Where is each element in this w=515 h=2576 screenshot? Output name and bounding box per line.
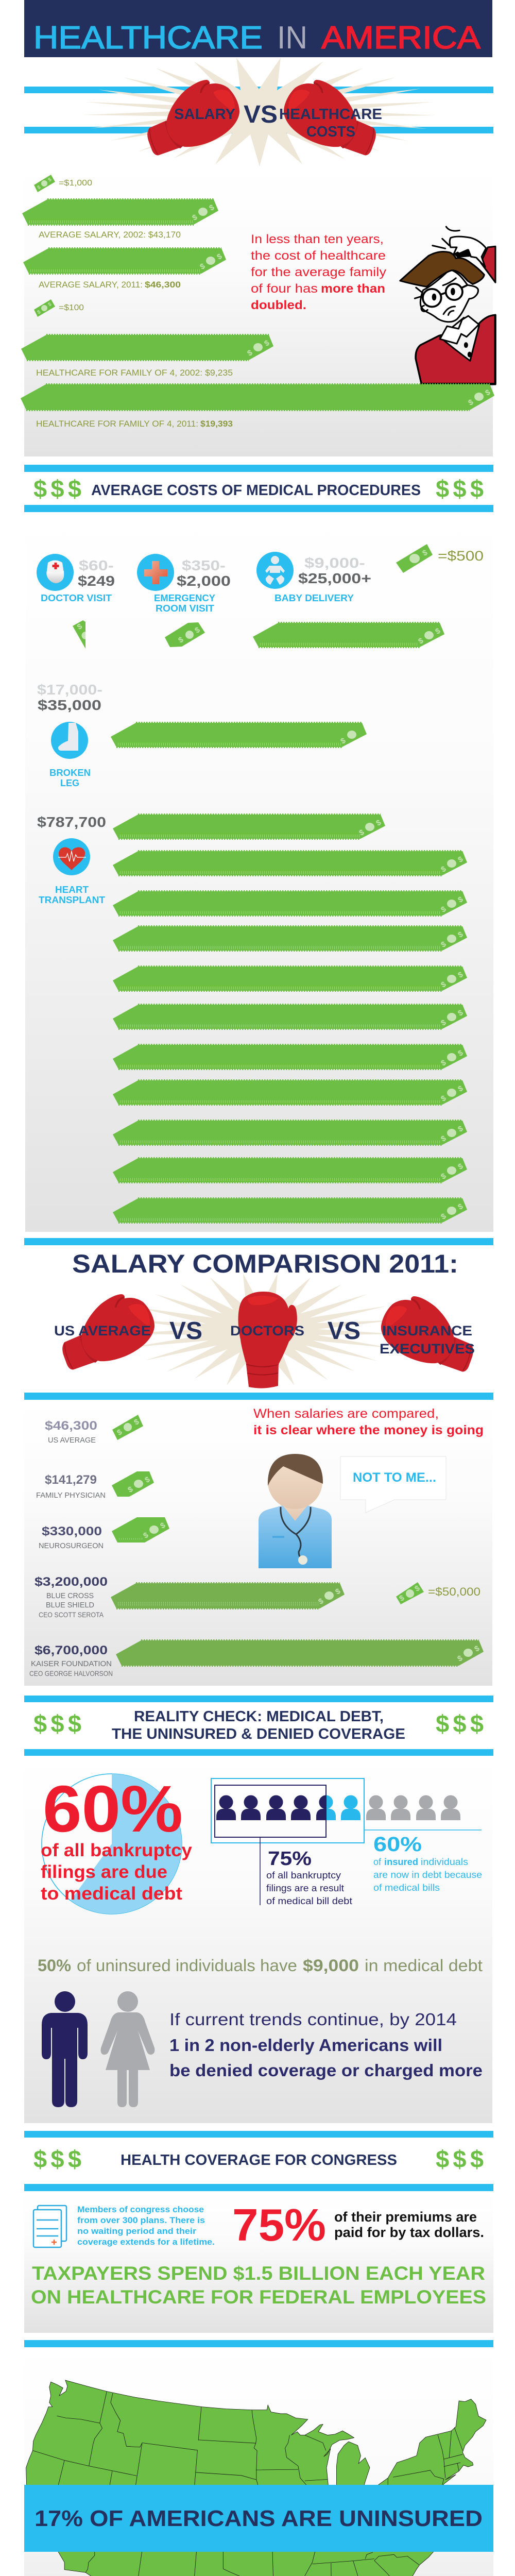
cost: doctor visit: DOCTOR VISIT (41, 593, 112, 603)
stat: 60 percent bankruptcies: 60% (43, 1772, 183, 1846)
stat: 60 percent of insured: are now in debt because (373, 1870, 482, 1880)
panel: medical procedure costs (25, 512, 493, 1232)
bar: transplant row 10: $ (439, 1172, 448, 1181)
salary: blue cross blue shield CEO: CEO SCOTT SEROTA (39, 1611, 104, 1619)
bar: transplant row 7: $ (456, 1048, 465, 1058)
heading: salary comparison: SALARY COMPARISON 2011: (72, 1249, 458, 1278)
icon: red cross (137, 554, 174, 591)
salary: US average: $46,300 (45, 1419, 97, 1433)
bar: transplant row 1 (113, 814, 385, 839)
bar: transplant row 4: $ (456, 930, 465, 940)
comparison labels: INSURANCE (382, 1323, 472, 1338)
icon: glove middle (238, 1292, 297, 1388)
header banner (24, 0, 492, 57)
legend: bill equals $1,000 (34, 175, 92, 192)
salary: kaiser foundation CEO: CEO GEORGE HALVORSON (29, 1669, 113, 1677)
cost: heart transplant (37, 814, 106, 905)
cost: doctor visit: $60- (79, 557, 114, 573)
panel: medical debt (24, 1756, 492, 2123)
bar: transplant row 2 (113, 851, 467, 876)
bar: transplant row 9: $ (456, 1124, 465, 1134)
bar: transplant row 6 (113, 1004, 467, 1029)
salary: blue cross blue shield CEO: $ (334, 1587, 342, 1597)
callout: where the money is going: it is clear where the money is going (253, 1423, 484, 1437)
heading: salary vs healthcare costs: SALARY (174, 106, 235, 123)
heading: average costs of medical procedures: $$$ (33, 475, 81, 502)
icon: glove left (62, 1294, 154, 1369)
bar: transplant row 1: $ (357, 828, 366, 838)
bar: transplant row 3: $ (456, 895, 465, 905)
section: salary comparison 2011 (24, 1238, 493, 1388)
icon: leg cast (51, 722, 88, 759)
salary: kaiser foundation CEO (29, 1640, 484, 1677)
bar: healthcare family of 4 2011 (21, 384, 494, 411)
callout: cost more than doubled: more than (321, 282, 385, 296)
salary: neurosurgeon: $ (159, 1521, 167, 1531)
bill: emergency room: $ (193, 625, 202, 635)
heading: health coverage for congress (24, 2131, 493, 2191)
salary: US average: US AVERAGE (48, 1436, 96, 1445)
salary: blue cross blue shield CEO: $3,200,000 (35, 1575, 108, 1589)
stat: 60 percent bankruptcies: to medical debt (41, 1884, 182, 1904)
bar: transplant row 6: $ (439, 1018, 448, 1028)
heading: salary vs healthcare costs: HEALTHCARE (279, 106, 382, 123)
bar: baby delivery: $ (417, 636, 425, 646)
callout: cost more than doubled (251, 232, 386, 312)
comparison labels: DOCTORS (230, 1323, 304, 1338)
speech bubble: not to me: NOT TO ME... (353, 1470, 436, 1485)
cost: emergency room visit: ROOM VISIT (156, 603, 214, 614)
heading: reality check (24, 1696, 493, 1756)
text: members of congress: from over 300 plans. There is (77, 2215, 205, 2225)
bar: transplant row 3 (113, 891, 467, 916)
salary: blue cross blue shield CEO (35, 1575, 345, 1619)
label: average salary 2011: AVERAGE SALARY, 2011: (39, 280, 143, 290)
speech bubble: not to me (340, 1456, 446, 1513)
heading: health coverage for congress: HEALTH COVERAGE FOR CONGRESS (121, 2152, 397, 2168)
stat: 75 percent of premiums (232, 2199, 484, 2250)
stat: 75 percent medical bill debt: 75% (268, 1848, 312, 1870)
cost: emergency room visit: $350- (182, 557, 226, 573)
text: members of congress: Members of congress choose (77, 2205, 204, 2214)
legend: bill equals $100: =$100 (59, 303, 84, 312)
bar: transplant row 2: $ (439, 865, 448, 874)
salary vs healthcare costs boxing graphic (24, 58, 493, 166)
text: taxpayers spend (31, 2263, 486, 2308)
bar: transplant row 7: $ (439, 1058, 448, 1068)
cost: broken leg (37, 682, 102, 788)
heading: reality check: $$$ (436, 1710, 484, 1737)
cost: heart transplant: TRANSPLANT (39, 895, 105, 905)
stat: 75 percent medical bill debt: of all bankruptcy (266, 1870, 341, 1880)
panel: salaries compared (24, 1393, 493, 1686)
bar: transplant row 5 (113, 966, 467, 991)
cost: broken leg: BROKEN (49, 768, 91, 778)
bar: healthcare family of 4 2011: $ (484, 388, 492, 398)
legend: bill equals $100 (34, 299, 84, 317)
text: denied coverage forecast: 1 in 2 non-elderly Americans will (169, 2036, 442, 2055)
heading: health coverage for congress: $$$ (436, 2145, 484, 2173)
legend: bill equals $100: $ (47, 301, 53, 308)
stat: 60 percent of insured: 60% (373, 1833, 422, 1856)
title: IN (277, 20, 307, 56)
label: healthcare 2011: HEALTHCARE FOR FAMILY OF 4, 2011: (36, 419, 198, 429)
bar: transplant row 5: $ (456, 970, 465, 980)
legend: bill equals $100: $ (37, 309, 42, 315)
bar: transplant row 3: $ (439, 905, 448, 914)
text: members of congress: coverage extends for a lifetime. (77, 2237, 215, 2247)
legend: bill equals $1,000: $ (47, 177, 53, 183)
legend: bill equals $50,000: $ (413, 1584, 422, 1594)
stat: 60 percent bankruptcies: filings are due (41, 1862, 167, 1882)
icon: glove right (381, 1296, 473, 1371)
banner: 17 percent uninsured (24, 2485, 493, 2552)
salary: neurosurgeon: $330,000 (42, 1524, 102, 1538)
heading: salary vs healthcare costs: VS (244, 101, 278, 128)
bar: transplant row 11: $ (439, 1212, 448, 1222)
comparison labels: US AVERAGE (54, 1323, 151, 1338)
text: taxpayers spend: TAXPAYERS SPEND $1.5 BILLION EACH YEAR (32, 2263, 485, 2284)
stat: 75 percent of premiums: of their premiums are (334, 2209, 477, 2225)
legend: bill equals $1,000: =$1,000 (59, 179, 92, 188)
cost: doctor visit (41, 557, 115, 603)
bar: broken leg (111, 722, 367, 748)
cost: emergency room visit (154, 557, 231, 614)
cost: baby delivery: $9,000- (304, 555, 365, 571)
icon: nurse hat (37, 554, 74, 591)
bar: transplant row 11: $ (456, 1202, 465, 1212)
bar: average salary 2002 (22, 199, 218, 225)
bar: average salary 2002: $ (208, 203, 216, 213)
legend: bill equals $50,000 (396, 1582, 480, 1604)
stat: 60 percent of insured: insured (384, 1857, 418, 1867)
stat: 60 percent of insured: of medical bills (373, 1883, 440, 1893)
bar: broken leg: $ (339, 736, 348, 746)
comparison labels: VS (169, 1317, 202, 1345)
callout: cost more than doubled: doubled. (251, 298, 306, 312)
salary: kaiser foundation CEO: $ (473, 1644, 482, 1654)
panel: salary and healthcare bars (21, 169, 495, 456)
cost: baby delivery (274, 555, 371, 603)
icon: woman (101, 1991, 154, 2107)
callout: cost more than doubled: for the average family (251, 265, 386, 279)
callout: where the money is going (253, 1406, 484, 1437)
stat: 75 percent of premiums: 75% (232, 2199, 326, 2250)
stat: 75 percent medical bill debt: of medical bill debt (266, 1896, 352, 1906)
salary: blue cross blue shield CEO: BLUE CROSS (46, 1591, 94, 1600)
salary: US average (45, 1415, 143, 1445)
bar: transplant row 11 (113, 1198, 467, 1223)
bar: healthcare family of 4 2002: $ (246, 348, 254, 358)
bar: transplant row 7 (113, 1044, 467, 1070)
label: healthcare 2002: HEALTHCARE FOR FAMILY OF 4, 2002: $9,235 (36, 368, 233, 378)
legend: bill equals $500 (396, 544, 484, 573)
heading: salary vs healthcare costs (174, 101, 382, 140)
stat: 75 percent medical bill debt (266, 1848, 352, 1906)
bar: transplant row 10: $ (456, 1162, 465, 1172)
text: denied coverage forecast: If current trends continue, by 2014 (169, 2010, 457, 2029)
icon: baby (256, 552, 294, 589)
cost: emergency room visit: $2,000 (177, 573, 231, 589)
salary: blue cross blue shield CEO: BLUE SHIELD (46, 1601, 94, 1609)
heading: reality check: THE UNINSURED & DENIED COVERAGE (112, 1726, 405, 1742)
bar: transplant row 5: $ (439, 980, 448, 990)
text: denied coverage forecast (169, 2010, 483, 2080)
bill: doctor visit fraction: $ (76, 622, 84, 632)
legend: bill equals $50,000: =$50,000 (428, 1585, 480, 1598)
legend: bill equals $1,000: $ (37, 184, 42, 191)
text: 50 percent of uninsured: 50% (38, 1956, 71, 1975)
cost: broken leg: $35,000 (38, 697, 101, 713)
legend: bill equals $500: $ (421, 548, 430, 558)
map: northern United States (26, 2380, 486, 2486)
chart: 60 percent pie (42, 1774, 182, 1914)
icon: heart with pulse (53, 838, 90, 875)
salary: neurosurgeon: $ (142, 1531, 150, 1540)
bar: transplant row 8 (113, 1080, 467, 1105)
cost: baby delivery: BABY DELIVERY (274, 593, 354, 603)
bar: average salary 2011 (23, 248, 226, 274)
bar: healthcare family of 4 2002 (21, 334, 273, 361)
salary: family physician: $ (126, 1485, 135, 1495)
bar: average salary 2011: $ (198, 262, 207, 272)
label: healthcare 2011: $19,393 (200, 419, 233, 429)
bill: emergency room (165, 622, 205, 647)
text: members of congress: no waiting period and their (77, 2226, 196, 2236)
bar: transplant row 9: $ (439, 1134, 448, 1144)
bar: baby delivery (253, 622, 444, 648)
stat: 75 percent of premiums: paid for by tax dollars. (334, 2225, 484, 2240)
text: 50 percent of uninsured: in medical debt (365, 1956, 483, 1975)
bar: baby delivery: $ (434, 626, 442, 636)
stat: 75 percent medical bill debt: filings are a result (266, 1883, 344, 1893)
bar: transplant row 10 (113, 1158, 467, 1183)
cost: heart transplant: HEART (55, 885, 89, 895)
salary: kaiser foundation CEO: $ (456, 1654, 465, 1664)
bill: doctor visit fraction (73, 620, 85, 649)
bar: average salary 2002: $ (191, 213, 199, 223)
bar: average salary 2011: $ (215, 252, 224, 262)
bar: transplant row 4 (113, 926, 467, 951)
map: southern United States (56, 2549, 436, 2576)
cost: doctor visit: $249 (78, 573, 115, 589)
bar: transplant row 6: $ (456, 1008, 465, 1018)
title (33, 20, 481, 56)
title: HEALTHCARE (33, 20, 263, 56)
label: average salary 2011: $46,300 (145, 280, 181, 290)
text: members of congress (77, 2205, 215, 2247)
salary: US average: $ (132, 1417, 141, 1427)
text: 50 percent of uninsured: $9,000 (303, 1956, 359, 1975)
heading: average costs of medical procedures: AVERAGE COSTS OF MEDICAL PROCEDURES (91, 482, 421, 499)
icon: documents (33, 2206, 66, 2247)
stat: 60 percent of insured: of (373, 1857, 382, 1867)
heading: reality check: $$$ (33, 1710, 81, 1737)
text: 50 percent of uninsured: of uninsured individuals have (77, 1956, 297, 1975)
salary: kaiser foundation CEO: KAISER FOUNDATION (31, 1659, 112, 1668)
heading: reality check: REALITY CHECK: MEDICAL DEBT, (134, 1708, 384, 1725)
bar: transplant row 8: $ (456, 1084, 465, 1094)
bar: transplant row 1: $ (374, 818, 383, 828)
label: average salary 2002: AVERAGE SALARY, 2002: $43,170 (39, 230, 181, 240)
stat: 60 percent of insured: individuals (421, 1857, 468, 1867)
salary: neurosurgeon (39, 1517, 169, 1550)
cost: emergency room visit: EMERGENCY (154, 593, 215, 603)
title: AMERICA (321, 20, 481, 56)
text: denied coverage forecast: be denied coverage or charged more (169, 2061, 483, 2080)
legend: bill equals $500: =$500 (438, 548, 484, 564)
character: worried man scratching head (400, 227, 495, 384)
heading: salary vs healthcare costs: COSTS (306, 124, 355, 140)
bar: transplant row 8: $ (439, 1094, 448, 1104)
bar: healthcare family of 4 2011: $ (467, 398, 475, 408)
cost: heart transplant: $787,700 (37, 814, 106, 830)
chart: people pictogram (211, 1778, 482, 1905)
cost: broken leg: LEG (60, 778, 79, 788)
comparison labels (54, 1317, 475, 1357)
banner: 17 percent uninsured: 17% OF AMERICANS ARE UNINSURED (35, 2506, 483, 2531)
legend: bill equals $50,000: $ (398, 1594, 406, 1603)
stat: 60 percent bankruptcies (41, 1772, 193, 1904)
bill: emergency room: $ (177, 635, 185, 645)
salary: family physician: $141,279 (45, 1473, 97, 1487)
stat: 60 percent of insured (373, 1833, 482, 1893)
panel: congress coverage (24, 2191, 493, 2333)
bar: transplant row 4: $ (439, 940, 448, 950)
panel: uninsured map (24, 2340, 493, 2576)
heading: average costs of medical procedures (24, 465, 493, 512)
callout: cost more than doubled: the cost of healthcare (251, 249, 386, 263)
comparison labels: VS (328, 1317, 360, 1345)
salary: family physician: $ (143, 1475, 152, 1485)
bar: transplant row 9 (113, 1120, 467, 1145)
callout: cost more than doubled: of four has (251, 282, 318, 296)
text: taxpayers spend: ON HEALTHCARE FOR FEDERAL EMPLOYEES (31, 2286, 486, 2308)
salary: blue cross blue shield CEO: $ (317, 1597, 325, 1606)
figure: doctor (259, 1454, 332, 1568)
salary: family physician: FAMILY PHYSICIAN (36, 1491, 106, 1500)
cost: broken leg: $17,000- (37, 682, 102, 698)
bar: transplant row 2: $ (456, 855, 465, 865)
bar: healthcare family of 4 2002: $ (263, 338, 271, 348)
callout: where the money is going: When salaries are compared, (253, 1406, 439, 1421)
salary: family physician (36, 1471, 154, 1500)
salary: neurosurgeon: NEUROSURGEON (39, 1541, 104, 1550)
salary: kaiser foundation CEO: $6,700,000 (35, 1643, 108, 1657)
comparison labels: EXECUTIVES (380, 1341, 475, 1357)
heading: health coverage for congress: $$$ (33, 2145, 81, 2173)
stat: 60 percent bankruptcies: of all bankruptcy (41, 1840, 193, 1860)
text: 50 percent of uninsured (38, 1956, 483, 1975)
callout: cost more than doubled: In less than ten years, (251, 232, 384, 246)
heading: average costs of medical procedures: $$$ (436, 475, 484, 502)
salary: US average: $ (115, 1428, 124, 1437)
cost: baby delivery: $25,000+ (298, 570, 371, 586)
icon: man (42, 1991, 88, 2107)
